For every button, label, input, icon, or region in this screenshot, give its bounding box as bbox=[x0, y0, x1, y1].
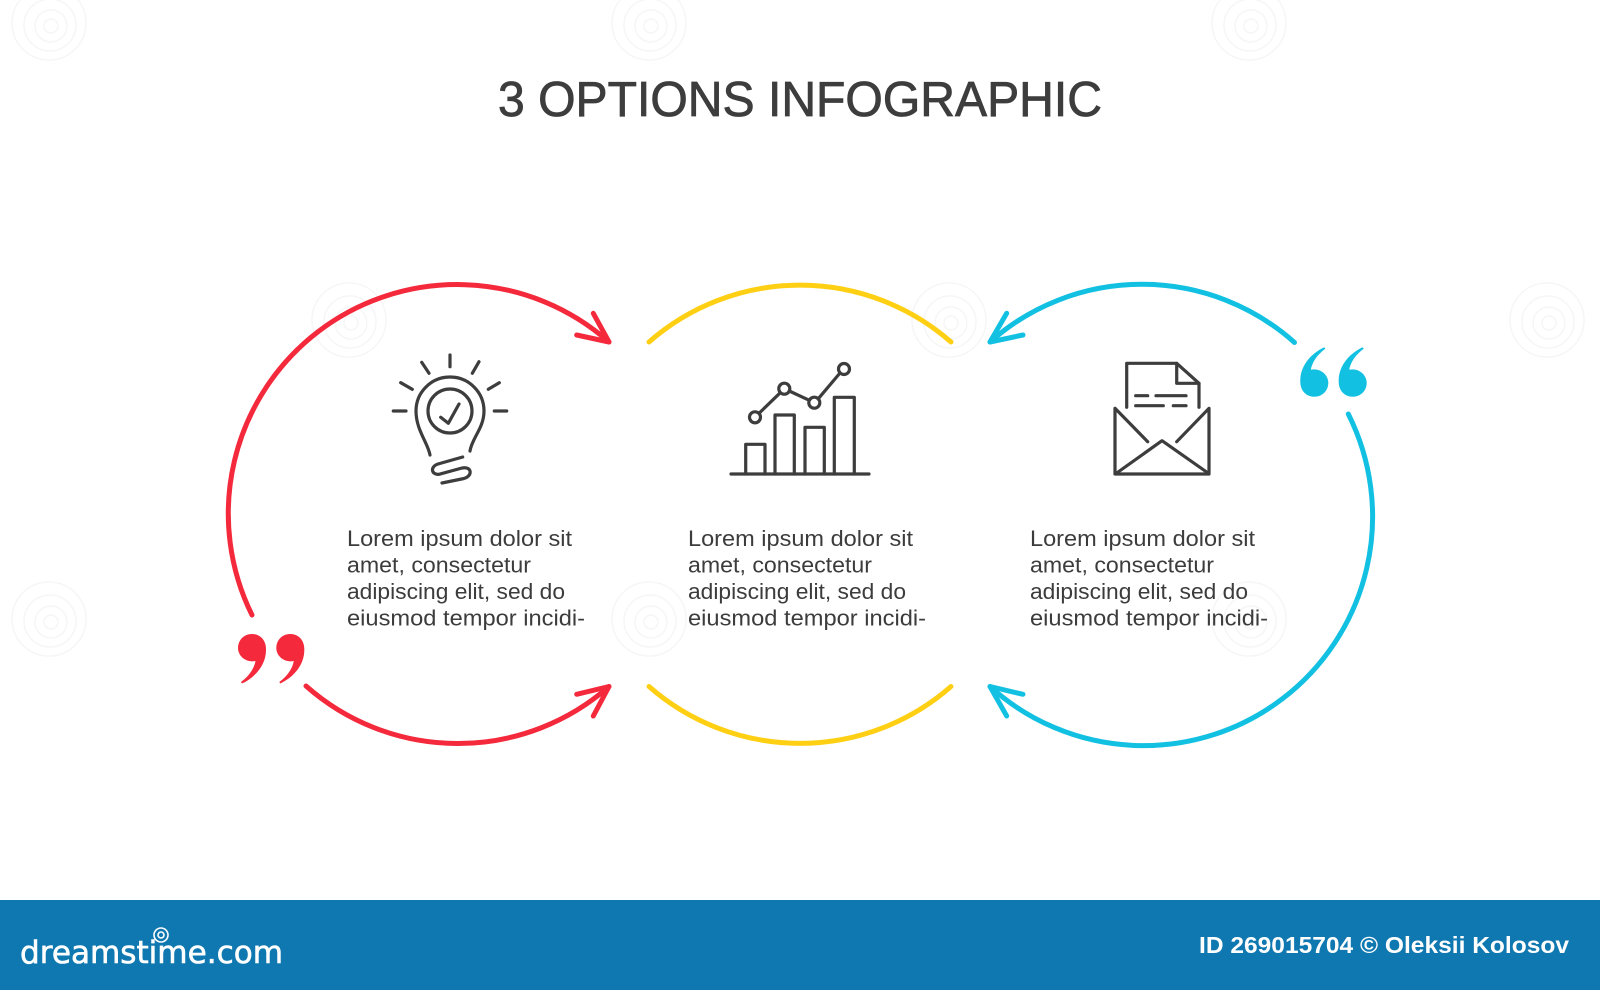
icon: blue opening quote bbox=[1300, 347, 1367, 397]
text block: option 3 bbox=[1030, 526, 1268, 630]
text block: option 2: Lorem ipsum dolor sit bbox=[688, 526, 913, 551]
red arc with bottom arrow bbox=[306, 686, 609, 744]
footer banner bbox=[0, 900, 1600, 990]
panel: option 2 yellow circle bbox=[649, 285, 951, 743]
text block: option 2 bbox=[688, 526, 926, 630]
image id and author: ID 269015704 © Oleksii Kolosov bbox=[1199, 932, 1569, 958]
text block: option 2: amet, consectetur bbox=[688, 552, 872, 578]
title: 3 OPTIONS INFOGRAPHIC bbox=[498, 72, 1102, 127]
panel: option 3 blue circle bbox=[990, 284, 1373, 746]
icon: logo spiral bbox=[154, 928, 168, 942]
text block: option 3: adipiscing elit, sed do bbox=[1030, 579, 1248, 604]
text block: option 1: eiusmod tempor incidi- bbox=[347, 606, 585, 630]
text block: option 2: adipiscing elit, sed do bbox=[688, 579, 906, 604]
logo text: dreamstime.com bbox=[20, 935, 283, 971]
text block: option 3: eiusmod tempor incidi- bbox=[1030, 606, 1268, 630]
blue arc with top arrow bbox=[990, 284, 1294, 342]
text block: option 3: Lorem ipsum dolor sit bbox=[1030, 526, 1255, 551]
yellow bottom arc bbox=[649, 686, 951, 743]
text block: option 1 bbox=[347, 526, 585, 630]
text block: option 1: amet, consectetur bbox=[347, 552, 531, 578]
icon: light bulb with check bbox=[393, 355, 507, 483]
red arc with top arrow bbox=[228, 285, 609, 615]
yellow top arc bbox=[649, 285, 951, 342]
icon: envelope with letter bbox=[1115, 363, 1209, 474]
panel: option 1 red circle bbox=[228, 285, 609, 744]
text block: option 3: amet, consectetur bbox=[1030, 552, 1214, 578]
blue arc with bottom arrow bbox=[990, 414, 1373, 746]
text block: option 1: adipiscing elit, sed do bbox=[347, 579, 565, 604]
text block: option 2: eiusmod tempor incidi- bbox=[688, 606, 926, 630]
icon: bar chart with trend line bbox=[731, 364, 869, 474]
text block: option 1: Lorem ipsum dolor sit bbox=[347, 526, 572, 551]
icon: red closing quote bbox=[238, 634, 304, 684]
